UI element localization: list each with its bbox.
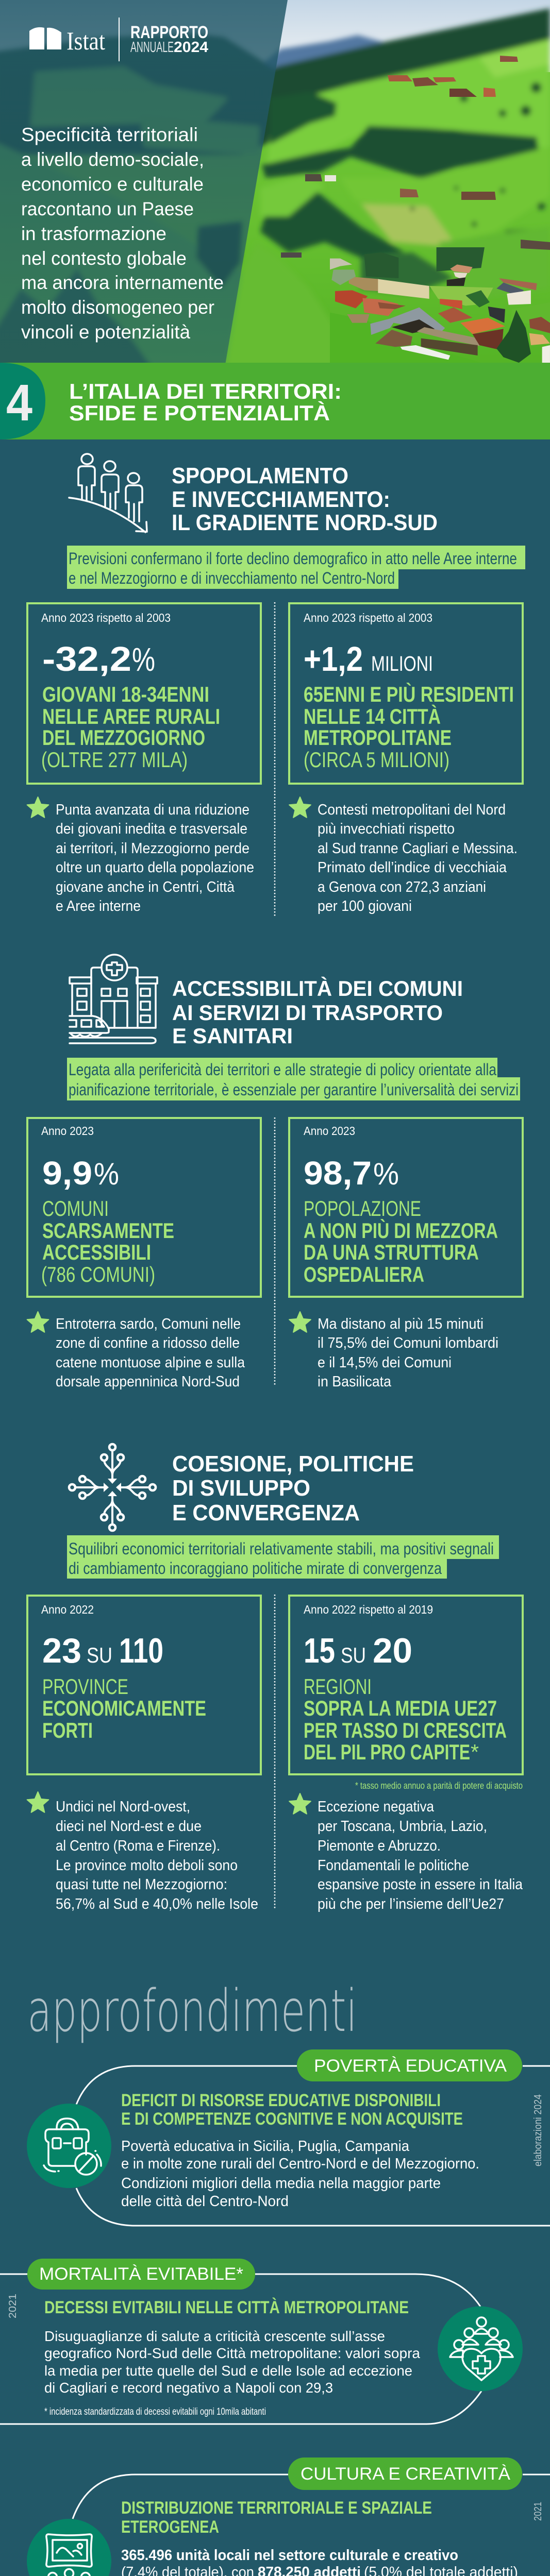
text block: anziani: a Genova con 272,3 anziani <box>318 879 486 895</box>
text block: distanze <box>318 1316 498 1390</box>
icon: star <box>289 797 311 818</box>
subheading: ETEROGENEA <box>121 2517 219 2537</box>
card: regioni: 20 <box>373 1631 412 1670</box>
heading: IL GRADIENTE NORD-SUD <box>172 510 438 535</box>
card: province: ECONOMICAMENTE <box>42 1696 206 1720</box>
highlighted summary <box>67 546 525 589</box>
icon: converging arrows <box>69 1444 156 1531</box>
text block: regioni: Eccezione negativa <box>318 1799 435 1815</box>
hero intro text: a livello demo-sociale, <box>21 149 204 170</box>
chapter title: L’ITALIA DEI TERRITORI: <box>69 379 342 403</box>
text block <box>44 2328 420 2396</box>
text block: giovani: e Aree interne <box>56 898 141 914</box>
tag: CULTURA E CREATIVITÀ <box>301 2464 510 2484</box>
panel: poverta educativa <box>27 2049 550 2226</box>
chapter number badge <box>0 363 45 439</box>
panel: cultura e creativita <box>27 2458 550 2576</box>
heading: E SANITARI <box>172 1024 293 1048</box>
card: province: SU <box>87 1643 112 1667</box>
heading: AI SERVIZI DI TRASPORTO <box>172 1001 443 1025</box>
text block: 365.496 unità locali nel settore culturale e creativo <box>121 2547 458 2564</box>
footnote: * incidenza standardizzata di decessi evitabili ogni 10mila abitanti <box>44 2406 266 2417</box>
left translucent panel <box>0 0 288 363</box>
highlighted summary: di cambiamento incoraggiano politiche mirate di convergenza <box>69 1559 442 1578</box>
card: regioni: DEL PIL PRO CAPITE <box>304 1740 470 1764</box>
text block: regioni: per Toscana, Umbria, Lazio, <box>318 1818 487 1835</box>
heading: E CONVERGENZA <box>172 1500 360 1526</box>
text block: giovani: ai territori, il Mezzogiorno perde <box>56 840 249 857</box>
subheading: DEFICIT DI RISORSE EDUCATIVE DISPONIBILI <box>121 2091 441 2110</box>
chapter title <box>69 379 342 425</box>
header logo: Istat and Rapporto Annuale 2024: Istat <box>66 26 105 55</box>
card: over 65: +1,2 <box>304 640 363 679</box>
text block: distanze: il 75,5% dei Comuni lombardi <box>318 1335 498 1351</box>
icon: people descending a slope <box>69 454 147 532</box>
card: regioni <box>289 1596 523 1774</box>
text block: province: Undici nel Nord-ovest, <box>56 1799 190 1815</box>
card: popolazione: Anno 2023 <box>304 1124 355 1138</box>
chapter number badge: 4 <box>6 374 32 432</box>
text block: anziani: Contesti metropolitani del Nord <box>318 802 506 818</box>
text block: province: 56,7% al Sud e 40,0% nelle Isole <box>56 1896 258 1912</box>
header logo: Istat and Rapporto Annuale 2024: 2024 <box>174 39 208 56</box>
scattered houses <box>281 56 550 258</box>
text block: regioni: più che per l’insieme dell’Ue27 <box>318 1896 504 1912</box>
text block: giovani: giovane anche in Centri, Città <box>56 879 235 895</box>
text block: delle città del Centro-Nord <box>121 2193 289 2210</box>
text block: regioni: Piemonte e Abruzzo. <box>318 1838 441 1854</box>
card: regioni: * <box>471 1740 479 1764</box>
hero intro text: Specificità territoriali <box>21 124 198 145</box>
text block: anziani: per 100 giovani <box>318 898 412 914</box>
text block: regioni <box>318 1799 523 1912</box>
card: giovani: DEL MEZZOGIORNO <box>42 725 205 750</box>
header logo: Istat and Rapporto Annuale 2024: RAPPORTO <box>130 23 208 42</box>
card: popolazione: POPOLAZIONE <box>304 1196 421 1221</box>
text block: anziani: Primato dell’indice di vecchiaia <box>318 859 507 876</box>
card: comuni: COMUNI <box>42 1196 109 1221</box>
card: regioni: REGIONI <box>304 1674 372 1699</box>
text block <box>121 2138 479 2210</box>
icon: painting and audience <box>27 2519 111 2576</box>
card: over 65: MILIONI <box>371 652 433 675</box>
card: giovani: -32,2 <box>42 640 131 679</box>
card: regioni: Anno 2022 rispetto al 2019 <box>304 1603 433 1616</box>
text block: province: quasi tutte nel Mezzogiorno: <box>56 1876 227 1893</box>
panel: spopolamento <box>27 454 525 914</box>
card: giovani: (OLTRE 277 MILA) <box>41 748 188 772</box>
text block: entroterra: zone di confine a ridosso delle <box>56 1335 240 1351</box>
hero intro text: in trasformazione <box>21 223 166 244</box>
card: regioni: 15 <box>304 1631 335 1670</box>
icon: community and heart <box>438 2306 523 2392</box>
card: popolazione: 98,7 <box>304 1155 372 1192</box>
card: province: 23 <box>42 1631 81 1670</box>
panel: accessibilita <box>27 955 523 1390</box>
text block: e in molte zone rurali del Centro-Nord e del Mezzogiorno. <box>121 2156 479 2172</box>
text block: entroterra: dorsale appenninica Nord-Sud <box>56 1374 240 1390</box>
card: province <box>27 1596 261 1774</box>
subheading <box>121 2498 432 2537</box>
card: giovani: GIOVANI 18-34ENNI <box>42 682 209 706</box>
icon: star <box>27 1792 48 1812</box>
hero intro text: vincoli e potenzialità <box>21 321 190 343</box>
card: giovani: Anno 2023 rispetto al 2003 <box>41 611 171 624</box>
highlighted summary <box>67 1058 520 1100</box>
text block: giovani: dei giovani inedita e trasversale <box>56 821 247 837</box>
text block: la media per tutte quelle del Sud e delle Isole ad eccezione <box>44 2363 412 2379</box>
card: over 65: NELLE 14 CITTÀ <box>304 704 441 728</box>
card: province: FORTI <box>42 1718 93 1742</box>
heading: COESIONE, POLITICHE <box>172 1451 414 1477</box>
tag: POVERTÀ EDUCATIVA <box>314 2056 507 2076</box>
card: province: Anno 2022 <box>41 1603 94 1616</box>
text block: province: al Centro (Roma e Firenze). <box>56 1838 220 1854</box>
card: comuni: (786 COMUNI) <box>41 1262 155 1286</box>
text block: geografico Nord-Sud delle Città metropolitane: valori sopra <box>44 2345 420 2361</box>
card: regioni: SU <box>341 1643 366 1667</box>
heading <box>172 976 463 1048</box>
hero intro text <box>21 124 224 343</box>
text block: province: dieci nel Nord-est e due <box>56 1818 202 1835</box>
hero intro text: molto disomogeneo per <box>21 297 214 318</box>
tag <box>297 2049 522 2081</box>
icon: Istat book logo <box>29 27 61 49</box>
heading: ACCESSIBILITÀ DEI COMUNI <box>172 976 463 1001</box>
text block: giovani: oltre un quarto della popolazione <box>56 859 254 876</box>
side note: 2021 <box>7 2294 19 2318</box>
card: giovani: % <box>132 641 155 678</box>
header logo: Istat and Rapporto Annuale 2024 <box>29 18 208 61</box>
side note: elaborazioni 2024 <box>532 2094 544 2166</box>
text block: regioni: Fondamentali le politiche <box>318 1857 469 1874</box>
icon: star <box>289 1312 311 1332</box>
text block: Povertà educativa in Sicilia, Puglia, Campania <box>121 2138 410 2155</box>
card: comuni: 9,9 <box>42 1155 92 1192</box>
icon: hospital and train <box>70 955 157 1043</box>
text block: distanze: e il 14,5% dei Comuni <box>318 1354 452 1371</box>
subheading: DECESSI EVITABILI NELLE CITTÀ METROPOLITANE <box>44 2298 409 2317</box>
card: province: 110 <box>119 1631 163 1670</box>
icon: star <box>27 797 48 818</box>
card: popolazione: % <box>373 1157 399 1191</box>
text block: distanze: in Basilicata <box>318 1374 392 1390</box>
card: comuni: % <box>94 1157 119 1191</box>
card: regioni: SOPRA LA MEDIA UE27 <box>304 1696 497 1720</box>
hero: mountain village photo <box>0 0 550 371</box>
text block: entroterra: Entroterra sardo, Comuni nelle <box>56 1316 241 1332</box>
text block: entroterra: catene montuose alpine e sulla <box>56 1354 245 1371</box>
highlighted summary: e nel Mezzogiorno e di invecchiamento nel Centro-Nord <box>69 569 395 587</box>
icon: backpack <box>27 2104 111 2188</box>
tag <box>288 2458 522 2490</box>
highlighted summary <box>67 1535 499 1579</box>
text block: entroterra <box>56 1316 245 1390</box>
text block: regioni: espansive poste in essere in Italia <box>318 1876 523 1893</box>
chapter band <box>0 363 550 439</box>
icon: star <box>289 1793 311 1814</box>
chapter title: SFIDE E POTENZIALITÀ <box>69 401 330 425</box>
heading <box>172 463 438 535</box>
card: over 65 <box>289 603 523 784</box>
card: popolazione: OSPEDALIERA <box>304 1262 424 1286</box>
text block <box>121 2547 518 2576</box>
card: giovani: NELLE AREE RURALI <box>42 704 220 728</box>
card: over 65: (CIRCA 5 MILIONI) <box>304 748 449 772</box>
panel: coesione <box>27 1444 523 1912</box>
side note: 2021 <box>532 2502 544 2521</box>
text block: Disuguaglianze di salute a criticità crescente sull’asse <box>44 2328 385 2344</box>
text block: giovani <box>56 802 254 914</box>
card: comuni: SCARSAMENTE <box>42 1218 174 1243</box>
heading <box>172 1451 414 1526</box>
text block: anziani: al Sud tranne Cagliari e Messina. <box>318 840 518 857</box>
subheading: DISTRIBUZIONE TERRITORIALE E SPAZIALE <box>121 2498 432 2518</box>
heading: DI SVILUPPO <box>172 1476 310 1501</box>
tag: MORTALITÀ EVITABILE* <box>39 2264 243 2284</box>
text block: anziani: più invecchiati rispetto <box>318 821 455 837</box>
subheading <box>121 2091 463 2129</box>
text block: province: Le province molto deboli sono <box>56 1857 238 1874</box>
tag <box>27 2259 255 2290</box>
card: over 65: Anno 2023 rispetto al 2003 <box>304 611 432 624</box>
card: over 65: METROPOLITANE <box>304 725 452 750</box>
icon: star <box>27 1312 48 1332</box>
header logo: Istat and Rapporto Annuale 2024: ANNUALE <box>130 39 174 56</box>
text block: di Cagliari e record negativo a Napoli con 29,3 <box>44 2380 333 2396</box>
card: popolazione <box>289 1118 523 1297</box>
panel: mortalita evitabile <box>0 2259 523 2424</box>
hero intro text: ma ancora internamente <box>21 272 224 293</box>
text block: giovani: Punta avanzata di una riduzione <box>56 802 249 818</box>
heading: approfondimenti: approfondimenti <box>27 1978 357 2045</box>
text block: province <box>56 1799 258 1912</box>
card: giovani <box>27 603 261 784</box>
subheading: E DI COMPETENZE COGNITIVE E NON ACQUISITE <box>121 2109 463 2129</box>
hero intro text: raccontano un Paese <box>21 198 194 219</box>
card: popolazione: A NON PIÙ DI MEZZORA <box>304 1218 498 1243</box>
card: comuni: Anno 2023 <box>41 1124 94 1138</box>
hero intro text: nel contesto globale <box>21 248 187 269</box>
card: popolazione: DA UNA STRUTTURA <box>304 1240 479 1264</box>
text block: anziani <box>318 802 518 914</box>
heading: SPOPOLAMENTO <box>172 463 348 488</box>
hero intro text: economico e culturale <box>21 174 204 195</box>
card: comuni <box>27 1118 261 1297</box>
card: province: PROVINCE <box>42 1674 128 1699</box>
card: comuni: ACCESSIBILI <box>42 1240 151 1264</box>
text block: Condizioni migliori della media nella maggior parte <box>121 2175 441 2192</box>
text block: distanze: Ma distano al più 15 minuti <box>318 1316 484 1332</box>
heading: E INVECCHIAMENTO: <box>172 487 390 512</box>
